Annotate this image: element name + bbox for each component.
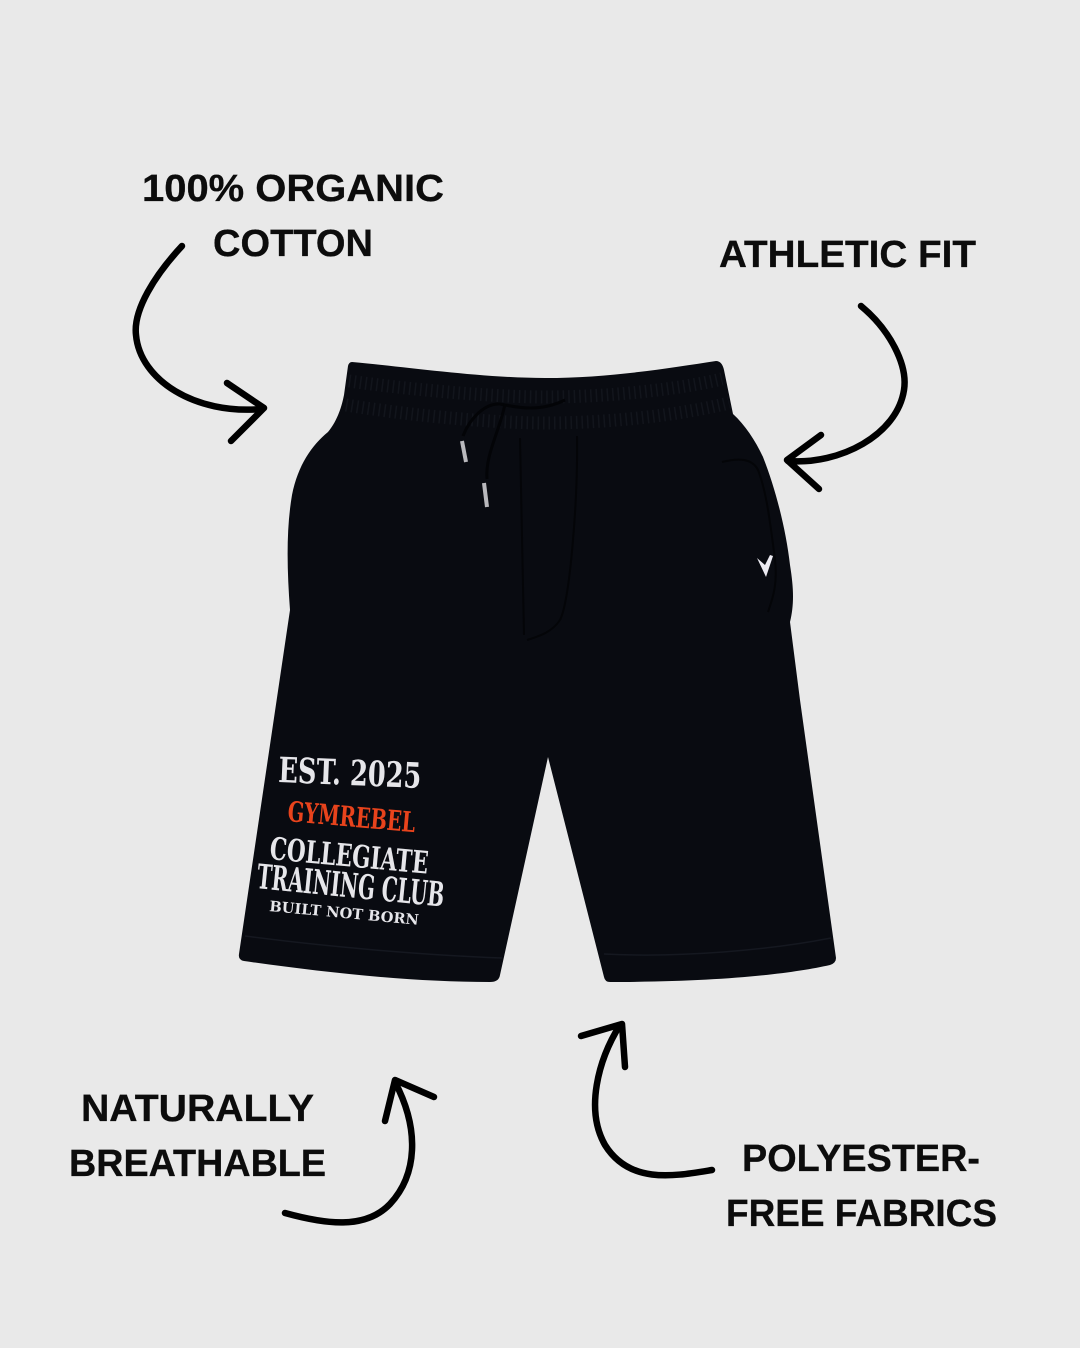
arrow: to organic cotton [136,246,264,441]
leg print: COLLEGIATE [268,831,430,882]
logo: chevron [757,555,773,577]
label: 100% organic cotton [142,168,444,265]
label: naturally breathable [69,1088,326,1185]
product: black shorts [239,361,836,982]
leg print: EST. 2025 [278,750,422,797]
shorts body [239,361,836,982]
arrow: to polyester-free fabrics [581,1024,712,1175]
label: polyester-free fabrics: POLYESTER- [742,1138,980,1180]
leg print: BUILT NOT BORN [269,898,420,929]
label: polyester-free fabrics: FREE FABRICS [726,1193,997,1235]
fly and pocket seams [520,436,776,640]
arrow: to athletic fit [787,306,905,489]
leg print: TRAINING CLUB [255,857,446,916]
label: athletic fit: ATHLETIC FIT [719,234,976,276]
waistband ribbing [346,379,729,423]
label: 100% organic cotton: 100% ORGANIC [142,168,444,210]
label: naturally breathable: NATURALLY [81,1088,314,1130]
drawstring [463,400,565,479]
arrow: to naturally breathable [285,1080,434,1222]
drawstring tips [462,441,487,507]
label: naturally breathable: BREATHABLE [69,1143,326,1185]
label: 100% organic cotton: COTTON [213,223,373,265]
leg print [255,750,446,929]
label: polyester-free fabrics [726,1138,997,1235]
hem lines [245,936,831,958]
leg print: GYMREBEL [286,795,417,839]
